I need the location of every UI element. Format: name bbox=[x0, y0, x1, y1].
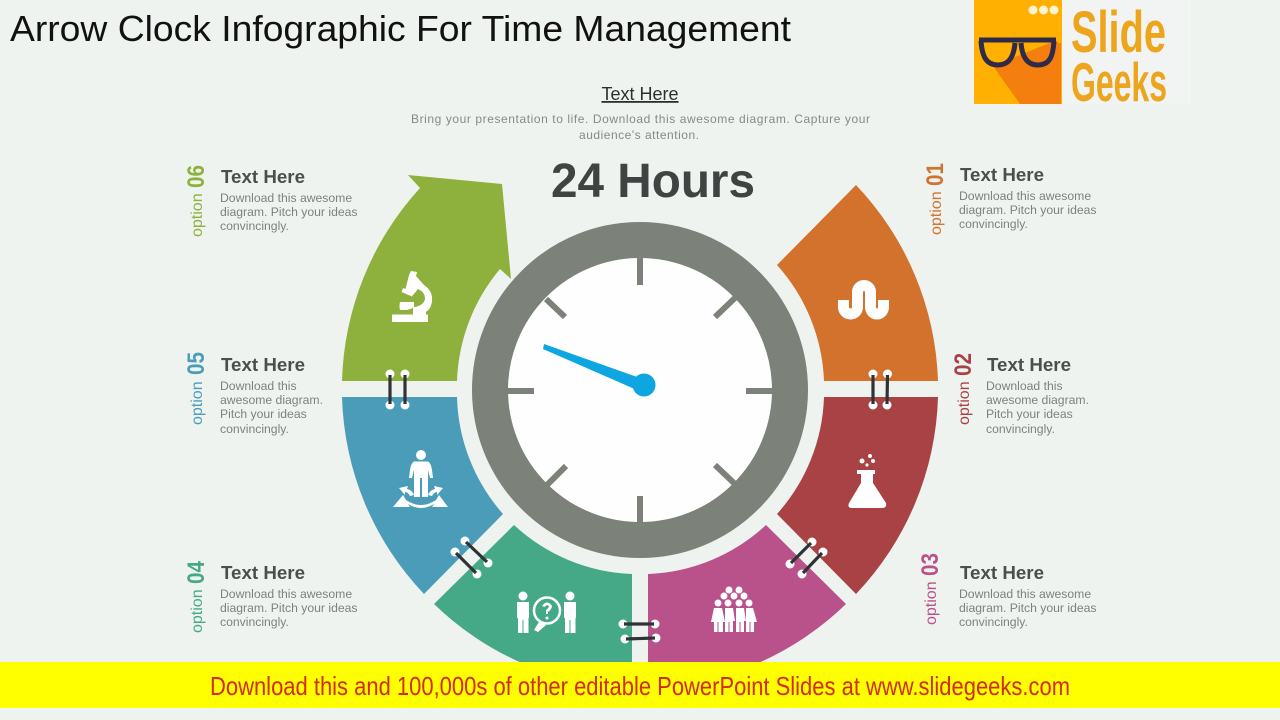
title: Arrow Clock Infographic For Time Management bbox=[10, 8, 791, 49]
option 04: diagram. Pitch your ideas bbox=[220, 601, 358, 615]
option 01: convincingly. bbox=[959, 217, 1028, 231]
option 05: 05 bbox=[183, 352, 210, 375]
option 03: convincingly. bbox=[959, 615, 1028, 629]
segment 02: red bbox=[777, 397, 938, 594]
option 06: option bbox=[189, 193, 206, 237]
option 03: Download this awesome bbox=[959, 587, 1091, 601]
header text block: Text Here bbox=[601, 84, 679, 104]
option 03: option bbox=[923, 581, 940, 625]
header text block: audience's attention. bbox=[579, 128, 699, 142]
option 03: 03 bbox=[917, 553, 944, 576]
option 01: 01 bbox=[922, 163, 949, 186]
option 06: Text Here bbox=[221, 167, 305, 187]
option 02: convincingly. bbox=[986, 422, 1055, 436]
icon: group of people bbox=[711, 586, 757, 632]
option 03 bbox=[917, 553, 1097, 629]
header text block bbox=[411, 84, 870, 142]
option 06: convincingly. bbox=[220, 219, 289, 233]
option 01: diagram. Pitch your ideas bbox=[959, 203, 1097, 217]
banner: Download this and 100,000s of other editable PowerPoint Slides at www.slidegeeks.com bbox=[210, 671, 1070, 701]
option 01: option bbox=[928, 191, 945, 235]
option 01: Text Here bbox=[960, 165, 1044, 185]
option 01 bbox=[922, 163, 1097, 235]
icon: people with magnifier bbox=[517, 592, 576, 633]
option 02: Download this bbox=[986, 379, 1063, 393]
option 01: Download this awesome bbox=[959, 189, 1091, 203]
option 05: Text Here bbox=[221, 355, 305, 375]
option 02: Text Here bbox=[987, 355, 1071, 375]
option 04 bbox=[183, 560, 358, 633]
option 06 bbox=[183, 165, 358, 237]
option 02: option bbox=[956, 381, 973, 425]
option 05: Download this bbox=[220, 379, 297, 393]
option 05: Pitch your ideas bbox=[220, 407, 307, 421]
segment 05: blue bbox=[342, 397, 503, 594]
heading: 24 Hours: 24 Hours bbox=[551, 155, 755, 208]
option 04: 04 bbox=[183, 560, 210, 584]
logo: Slide Geeks: Geeks bbox=[1071, 51, 1167, 113]
icon: stumbleupon bbox=[844, 286, 884, 314]
option 02 bbox=[950, 353, 1089, 436]
segment 04: teal bbox=[434, 525, 632, 688]
icon: flask bbox=[848, 454, 886, 508]
header text block: Bring your presentation to life. Download this awesome diagram. Capture your bbox=[411, 112, 870, 126]
segment 01: orange bbox=[777, 185, 938, 381]
segment 06: green arrow bbox=[342, 175, 511, 381]
clock hand bbox=[543, 344, 656, 396]
clock bbox=[490, 240, 790, 540]
option 06: 06 bbox=[183, 165, 210, 188]
option 04: Text Here bbox=[221, 563, 305, 583]
option 04: option bbox=[189, 589, 206, 633]
option 02: awesome diagram. bbox=[986, 393, 1089, 407]
option 04: convincingly. bbox=[220, 615, 289, 629]
icon: businessman with arrows bbox=[393, 450, 448, 508]
option 06: diagram. Pitch your ideas bbox=[220, 205, 358, 219]
stitches between segments bbox=[386, 370, 892, 644]
icon: microscope bbox=[392, 271, 432, 322]
clock ticks bbox=[507, 258, 773, 523]
option 02: 02 bbox=[950, 353, 977, 376]
segment 03: pink bbox=[648, 525, 846, 688]
option 05: awesome diagram. bbox=[220, 393, 323, 407]
logo: Slide Geeks bbox=[974, 0, 1190, 113]
option 05: convincingly. bbox=[220, 422, 289, 436]
option 03: Text Here bbox=[960, 563, 1044, 583]
option 05 bbox=[183, 352, 323, 436]
option 05: option bbox=[189, 381, 206, 425]
option 04: Download this awesome bbox=[220, 587, 352, 601]
option 06: Download this awesome bbox=[220, 191, 352, 205]
logo: Slide Geeks: Slide bbox=[1071, 0, 1166, 65]
option 02: Pitch your ideas bbox=[986, 407, 1073, 421]
banner bbox=[0, 662, 1280, 708]
option 03: diagram. Pitch your ideas bbox=[959, 601, 1097, 615]
